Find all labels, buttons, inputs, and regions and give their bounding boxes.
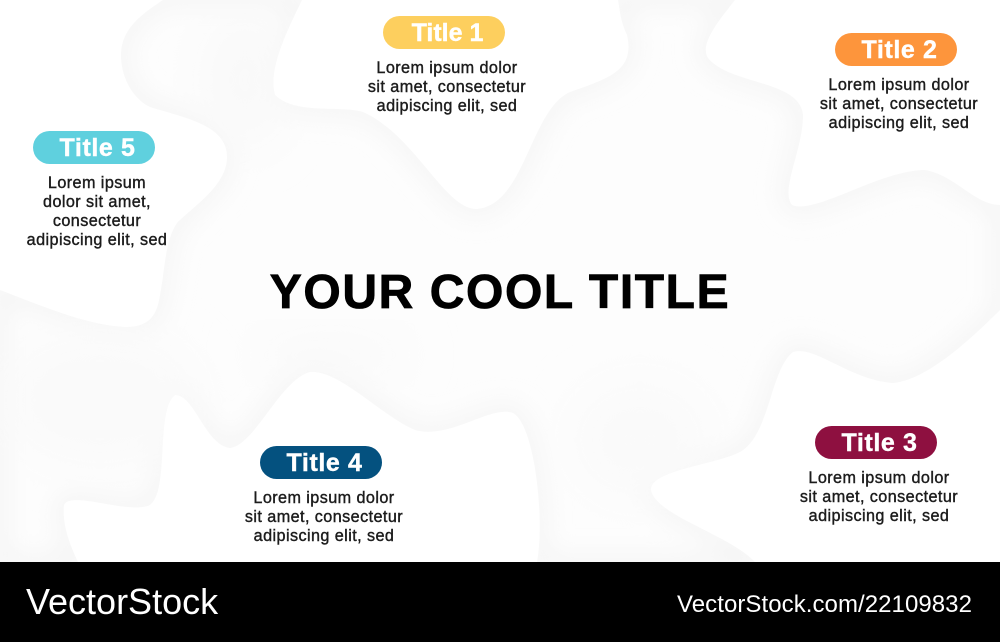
text: item 2: Lorem ipsum dolor (828, 76, 970, 94)
text: item 3: adipiscing elit, sed (809, 507, 949, 525)
text: item 2: adipiscing elit, sed (829, 114, 969, 132)
item 5 (27, 131, 167, 249)
text: item 1 (368, 59, 526, 115)
text: item 5 (27, 174, 167, 249)
text: item 3: Lorem ipsum dolor (808, 469, 950, 487)
item 1 (368, 16, 526, 115)
text: item 3: sit amet, consectetur (800, 488, 958, 506)
badge: title 5: Title 5 (60, 134, 136, 162)
text: item 4: sit amet, consectetur (245, 508, 403, 526)
text: item 2 (820, 76, 978, 132)
item 4 (245, 446, 403, 545)
watermark logo: VectorStock (26, 581, 218, 622)
text: item 2: sit amet, consectetur (820, 95, 978, 113)
footer bar (0, 562, 1000, 642)
item 3 (800, 426, 958, 525)
text: item 5: adipiscing elit, sed (27, 231, 167, 249)
badge: title 3 (815, 426, 937, 459)
badge: title 2: Title 2 (862, 36, 938, 64)
badge: title 4: Title 4 (286, 449, 362, 477)
text: item 1: adipiscing elit, sed (377, 97, 517, 115)
text: item 4: adipiscing elit, sed (254, 527, 394, 545)
background blob shapes (1, 2, 747, 562)
text: item 5: consectetur (53, 212, 141, 230)
text: item 5: Lorem ipsum (48, 174, 146, 192)
text: item 1: Lorem ipsum dolor (376, 59, 518, 77)
text: item 1: sit amet, consectetur (368, 78, 526, 96)
badge: title 5 (33, 131, 155, 164)
text: item 3 (800, 469, 958, 525)
watermark url: VectorStock.com/22109832 (677, 591, 972, 618)
badge: title 2 (835, 33, 957, 66)
badge: title 3: Title 3 (842, 429, 918, 457)
text: item 4 (245, 489, 403, 545)
badge: title 1 (383, 16, 505, 49)
text: item 4: Lorem ipsum dolor (253, 489, 395, 507)
text: item 5: dolor sit amet, (43, 193, 151, 211)
badge: title 1: Title 1 (412, 19, 483, 47)
badge: title 4 (260, 446, 382, 479)
item 2 (820, 33, 978, 132)
title: YOUR COOL TITLE (270, 266, 730, 319)
